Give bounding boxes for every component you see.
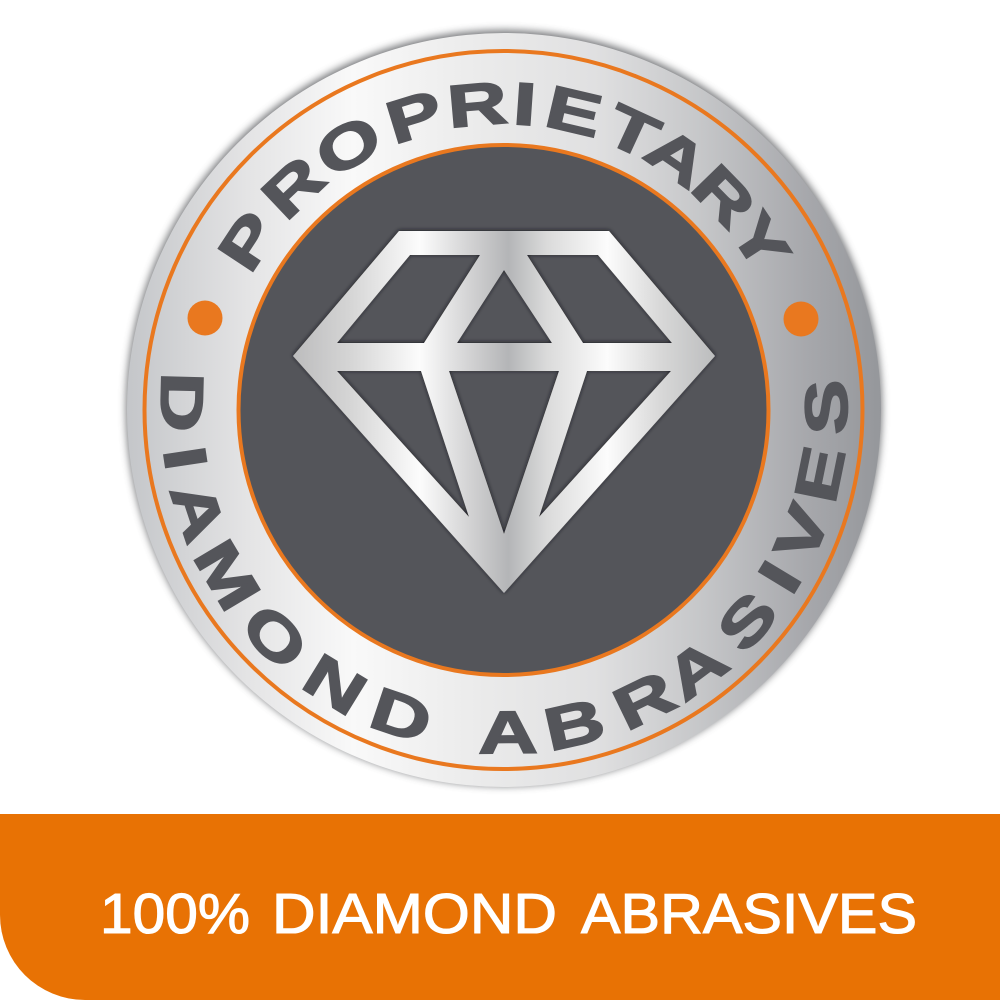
curved heading: DIAMOND ABRASIVES: E — [783, 441, 859, 508]
curved heading: DIAMOND ABRASIVES: N — [292, 641, 378, 729]
curved heading: DIAMOND ABRASIVES: A — [478, 700, 538, 767]
curved heading: PROPRIETARY: P — [378, 78, 451, 157]
curved heading: DIAMOND ABRASIVES: A — [653, 625, 740, 714]
curved heading: PROPRIETARY: R — [249, 143, 338, 232]
curved heading: DIAMOND ABRASIVES: M — [180, 529, 273, 622]
curved heading: DIAMOND ABRASIVES: I — [746, 550, 815, 604]
curved heading: DIAMOND ABRASIVES: S — [705, 579, 791, 665]
banner text: DIAMOND — [272, 882, 557, 946]
curved heading: PROPRIETARY: E — [539, 74, 608, 151]
curved heading: DIAMOND ABRASIVES: R — [603, 658, 686, 744]
curved heading: PROPRIETARY: P — [206, 200, 292, 283]
curved heading: PROPRIETARY: R — [445, 70, 510, 141]
curved heading: DIAMOND ABRASIVES: V — [761, 495, 844, 571]
badge — [126, 30, 882, 787]
curved heading: DIAMOND ABRASIVES: I — [150, 442, 219, 475]
curved heading: DIAMOND ABRASIVES: B — [538, 686, 611, 764]
curved heading: PROPRIETARY: R — [679, 152, 768, 241]
left orange dot — [188, 300, 222, 336]
curved heading: PROPRIETARY: T — [595, 92, 669, 173]
icon: diamond — [293, 231, 715, 593]
curved heading: DIAMOND ABRASIVES: A — [156, 473, 238, 551]
metallic ring — [127, 33, 881, 787]
outer orange ring — [144, 51, 862, 769]
inner dark disc with orange outline — [238, 145, 768, 675]
curved heading: PROPRIETARY: Y — [717, 201, 803, 283]
curved heading: DIAMOND ABRASIVES: O — [228, 591, 321, 683]
curved heading: DIAMOND ABRASIVES: S — [794, 379, 861, 435]
orange banner — [0, 814, 1000, 1000]
curved heading: PROPRIETARY: I — [511, 71, 539, 139]
curved heading: PROPRIETARY — [206, 70, 803, 283]
curved heading: DIAMOND ABRASIVES: D — [147, 371, 215, 433]
curved heading: DIAMOND ABRASIVES: D — [362, 675, 440, 757]
banner background — [0, 814, 1000, 1000]
curved heading: PROPRIETARY: A — [633, 113, 720, 202]
banner text — [100, 882, 917, 946]
banner text: 100% — [100, 882, 250, 946]
banner text: ABRASIVES — [581, 882, 917, 946]
curved heading: PROPRIETARY: O — [304, 101, 393, 191]
curved heading: DIAMOND ABRASIVES — [147, 371, 861, 767]
badge shadow — [126, 30, 882, 786]
right orange dot — [784, 302, 818, 336]
